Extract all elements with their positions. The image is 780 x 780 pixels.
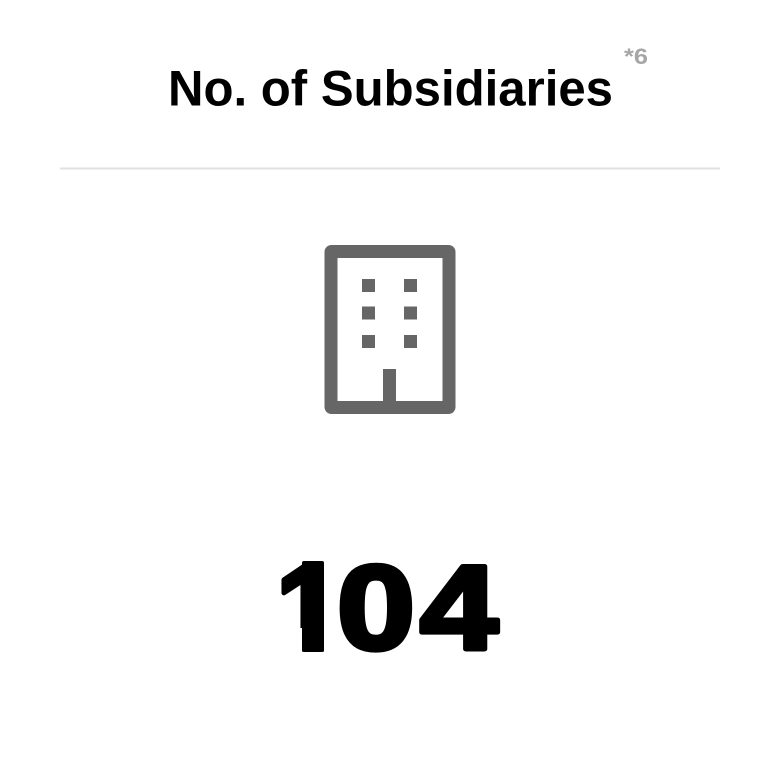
subsidiaries count: 4 [420, 541, 498, 675]
subsidiaries count [270, 541, 498, 675]
subsidiaries count: 0 [337, 541, 415, 675]
subsidiaries count: 1 [276, 541, 340, 675]
title: No. of Subsidiaries [168, 60, 613, 116]
icon: office building [324, 245, 456, 414]
footnote marker: *6 [624, 44, 648, 69]
